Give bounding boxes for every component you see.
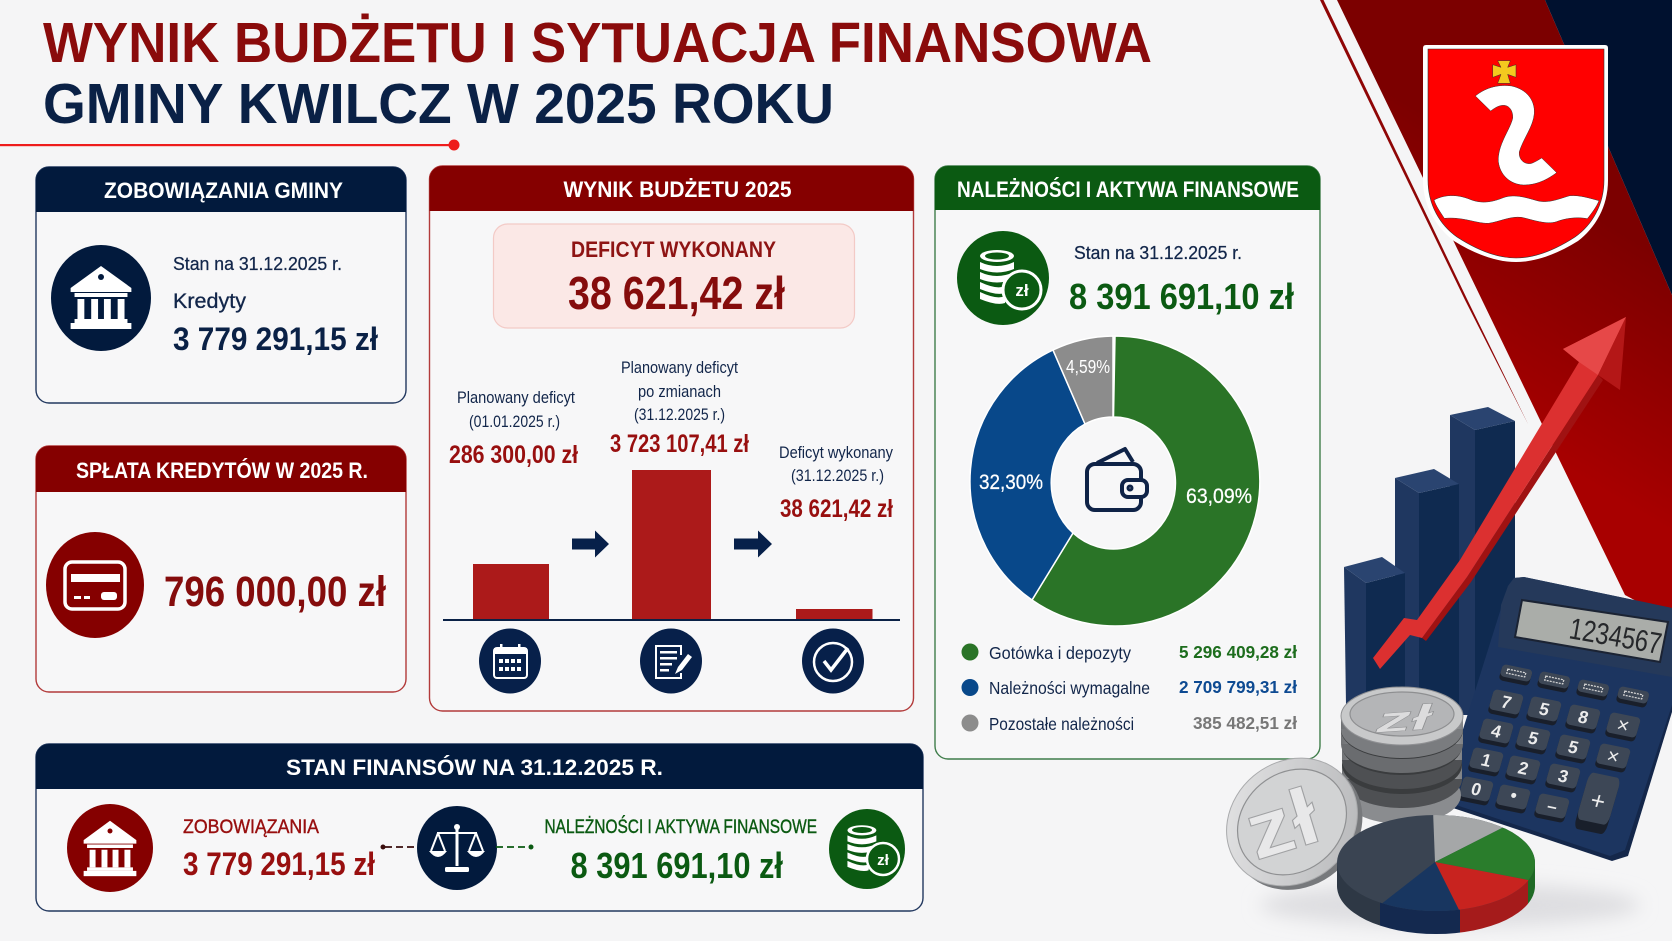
calculator keys: 8 bbox=[1576, 706, 1591, 728]
title: WYNIK BUDŻETU I SYTUACJA FINANSOWA bbox=[43, 11, 1152, 75]
icon: bank red bbox=[67, 804, 153, 892]
text: zobowiązania: 3 779 291,15 zł bbox=[183, 846, 375, 882]
callout: deficyt wykonany bbox=[494, 224, 854, 328]
icon: coins bbox=[957, 231, 1049, 325]
text: zobowiązania bbox=[183, 817, 375, 882]
decoration: diagonal bands bbox=[1320, 0, 1672, 620]
donut chart: 63,09% bbox=[1186, 485, 1252, 508]
calculator keys: – bbox=[1545, 795, 1560, 817]
icon: coins green bbox=[829, 809, 905, 889]
calculator keys: 0 bbox=[1469, 778, 1484, 800]
label: deficyt wykonany: Deficyt wykonany bbox=[779, 443, 893, 462]
panel: zobowiązania gminy bbox=[36, 167, 406, 403]
calculator keys: 1 bbox=[1479, 749, 1494, 771]
calculator keys: 7 bbox=[1499, 691, 1514, 713]
label: planowany deficyt: Planowany deficyt bbox=[457, 388, 575, 407]
header bbox=[430, 166, 914, 211]
calculator keys: 4 bbox=[1489, 720, 1504, 742]
text: stan: Stan na 31.12.2025 r. bbox=[173, 253, 342, 274]
legend: należności wymagalne: Należności wymagalne bbox=[989, 678, 1150, 698]
coat of arms shield bbox=[1423, 45, 1608, 262]
calculator keys bbox=[1457, 664, 1650, 835]
legend: należności wymagalne bbox=[962, 677, 1297, 698]
value: kredyty: 3 779 291,15 zł bbox=[173, 321, 378, 357]
label: planowany deficyt: (01.01.2025 r.) bbox=[469, 412, 560, 431]
panel: stan finansów bbox=[36, 744, 923, 911]
text: należności: 8 391 691,10 zł bbox=[570, 845, 783, 886]
donut chart: 32,30% bbox=[979, 471, 1043, 494]
calculator keys: × bbox=[1614, 713, 1632, 738]
decoration: ground shadow bbox=[1260, 883, 1640, 927]
calculator keys: 5 bbox=[1566, 736, 1581, 758]
arrow: first bbox=[572, 530, 609, 558]
title: GMINY KWILCZ W 2025 ROKU bbox=[43, 72, 834, 136]
label: planowany deficyt po zmianach: 3 723 107,41 zł bbox=[610, 430, 749, 458]
icon: card bbox=[46, 532, 144, 638]
legend: należności wymagalne: 2 709 799,31 zł bbox=[1179, 677, 1297, 697]
label: planowany deficyt po zmianach bbox=[610, 358, 749, 458]
header: ZOBOWIĄZANIA GMINY bbox=[104, 178, 343, 203]
shield river bbox=[1434, 196, 1599, 223]
title bbox=[43, 11, 1152, 136]
value: spłata: 796 000,00 zł bbox=[164, 568, 386, 616]
header: WYNIK BUDŻETU 2025 bbox=[564, 177, 792, 202]
donut chart: 4,59% bbox=[1066, 357, 1110, 377]
callout: deficyt wykonany: DEFICYT WYKONANY bbox=[571, 237, 776, 262]
header: NALEŻNOŚCI I AKTYWA FINANSOWE bbox=[957, 177, 1299, 202]
label: deficyt wykonany bbox=[779, 443, 893, 523]
chart bars 3d bbox=[1344, 407, 1515, 715]
calculator keys: 5 bbox=[1537, 698, 1552, 720]
label: deficyt wykonany: 38 621,42 zł bbox=[780, 495, 893, 523]
label: planowany deficyt po zmianach: Planowany deficyt bbox=[621, 358, 738, 377]
label: planowany deficyt po zmianach: po zmianach bbox=[638, 382, 721, 401]
label: planowany deficyt po zmianach: (31.12.2025 r.) bbox=[634, 405, 725, 424]
calculator keys: × bbox=[1604, 744, 1622, 769]
icon: scales bbox=[417, 806, 497, 890]
calculator bbox=[1443, 577, 1672, 861]
label: deficyt wykonany: (31.12.2025 r.) bbox=[791, 466, 884, 485]
header bbox=[36, 744, 923, 789]
panel: należności i aktywa finansowe bbox=[935, 166, 1320, 759]
calculator keys: • bbox=[1508, 785, 1520, 806]
panel: spłata kredytów bbox=[36, 446, 406, 692]
header bbox=[935, 166, 1320, 210]
panel: wynik budżetu 2025 bbox=[430, 166, 914, 711]
text: należności bbox=[544, 816, 817, 886]
icon: document bbox=[640, 628, 702, 694]
connector: left bbox=[380, 844, 417, 850]
text: stan: Stan na 31.12.2025 r. bbox=[1074, 243, 1242, 263]
text: zobowiązania: ZOBOWIĄZANIA bbox=[183, 817, 319, 838]
large coin: zł bbox=[1235, 771, 1329, 877]
arrow: growth bbox=[1373, 317, 1626, 669]
pie chart 3d bbox=[1337, 815, 1535, 934]
header: SPŁATA KREDYTÓW W 2025 R. bbox=[76, 458, 368, 483]
shield cross bbox=[1493, 61, 1516, 83]
legend: pozostałe należności: 385 482,51 zł bbox=[1193, 713, 1297, 733]
value: suma: 8 391 691,10 zł bbox=[1069, 276, 1294, 317]
title underline bbox=[0, 140, 460, 150]
legend: gotówka: Gotówka i depozyty bbox=[989, 643, 1131, 663]
label: planowany deficyt: 286 300,00 zł bbox=[449, 441, 578, 469]
text: kredyty: Kredyty bbox=[173, 290, 247, 313]
shield snake bbox=[1475, 86, 1557, 185]
icon: coins: zł bbox=[1015, 281, 1029, 300]
callout: deficyt wykonany: 38 621,42 zł bbox=[568, 267, 785, 319]
icon: wallet bbox=[1087, 449, 1147, 510]
legend: gotówka bbox=[962, 642, 1297, 663]
calculator keys: 2 bbox=[1516, 757, 1531, 779]
legend: gotówka: 5 296 409,28 zł bbox=[1179, 642, 1297, 662]
label: planowany deficyt bbox=[449, 388, 578, 469]
icon: calendar bbox=[479, 628, 541, 694]
calculator keys: 3 bbox=[1556, 765, 1571, 787]
donut chart bbox=[970, 336, 1260, 626]
header: STAN FINANSÓW NA 31.12.2025 R. bbox=[286, 755, 663, 780]
coin stack bbox=[1341, 687, 1463, 824]
icon: coins green: zł bbox=[877, 852, 890, 869]
calculator keys: 5 bbox=[1526, 727, 1541, 749]
bar chart bbox=[443, 470, 900, 621]
header bbox=[36, 446, 406, 492]
large coin bbox=[1201, 732, 1388, 916]
text: należności: NALEŻNOŚCI I AKTYWA FINANSOWE bbox=[544, 816, 817, 838]
arrow: second bbox=[734, 530, 772, 558]
connector: right bbox=[496, 844, 534, 850]
icon: check bbox=[802, 628, 864, 694]
header bbox=[36, 167, 406, 212]
calculator keys: + bbox=[1587, 787, 1609, 816]
legend: pozostałe należności: Pozostałe należności bbox=[989, 714, 1134, 734]
legend: pozostałe należności bbox=[962, 713, 1297, 734]
coin stack: zł bbox=[1370, 697, 1440, 741]
icon: bank bbox=[51, 245, 151, 351]
